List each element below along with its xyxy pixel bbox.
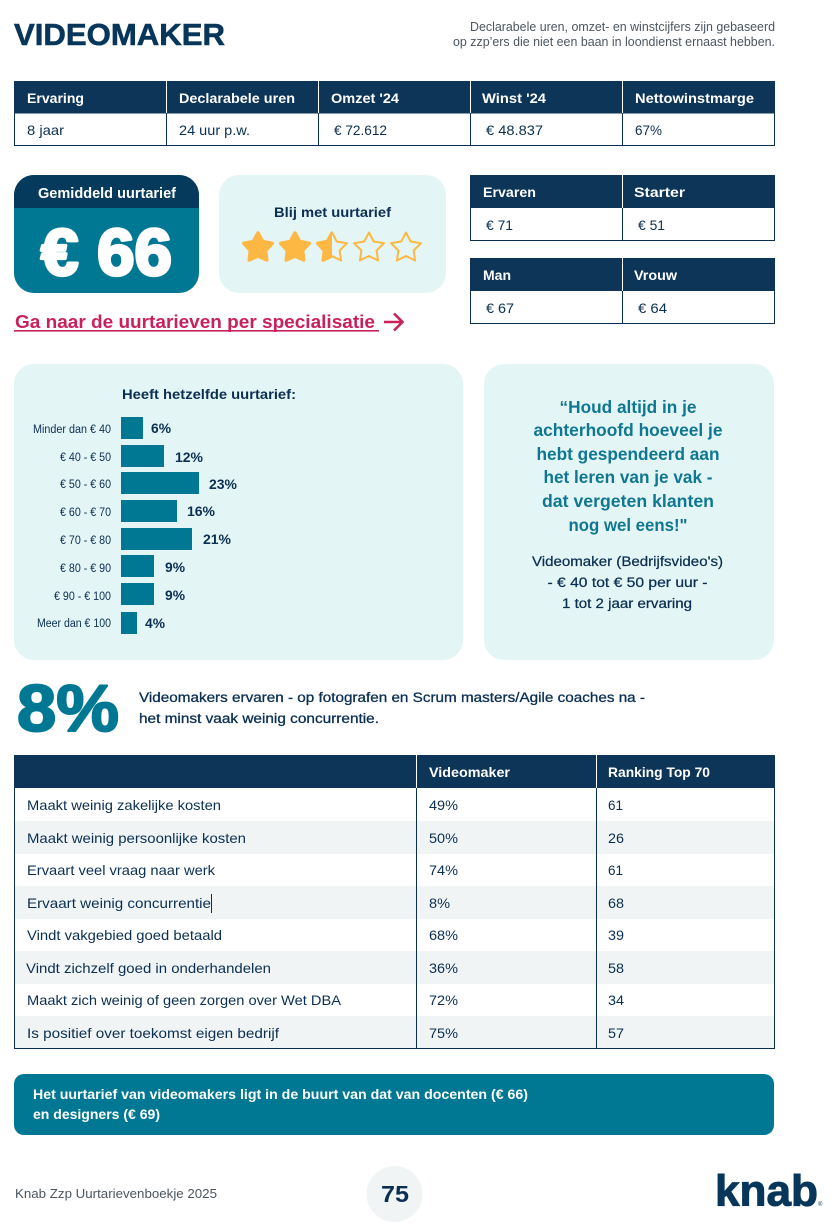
- column: ranking values: 57: [608, 1025, 624, 1041]
- callout: en designers (€ 69): [33, 1107, 160, 1122]
- intro note: Declarabele uren, omzet- en winstcijfers zijn gebaseerd: [470, 20, 775, 34]
- table: experience: Ervaren: [483, 184, 536, 200]
- table: gender: € 67: [486, 300, 514, 316]
- row labels: Maakt zich weinig of geen zorgen over Wet DBA: [27, 992, 342, 1008]
- card: happy with rate: Blij met uurtarief: [274, 204, 391, 220]
- table: key figures: Ervaring: [27, 90, 84, 106]
- quote text: [534, 397, 723, 535]
- star rating: [244, 232, 421, 260]
- row labels: Is positief over toekomst eigen bedrijf: [27, 1025, 279, 1041]
- intro note: op zzp’ers die niet een baan in loondienst ernaast hebben.: [453, 35, 775, 49]
- bar chart: € 50 - € 60: [60, 479, 111, 491]
- row labels: Vindt vakgebied goed betaald: [27, 927, 222, 943]
- quote attribution: Videomaker (Bedrijfsvideo's): [532, 554, 723, 569]
- quote text: dat vergeten klanten: [542, 491, 714, 511]
- bar chart: [33, 417, 237, 634]
- bar chart: 12%: [175, 450, 203, 465]
- stat description: [139, 690, 645, 726]
- bar chart: € 60 - € 70: [60, 507, 111, 519]
- table: key figures: 67%: [635, 122, 662, 138]
- panel: rate distribution: Heeft hetzelfde uurtarief:: [122, 386, 296, 402]
- footer source: Knab Zzp Uurtarievenboekje 2025: [15, 1187, 217, 1201]
- arrow: [384, 314, 402, 330]
- table: gender: € 64: [638, 300, 667, 316]
- column: Videomaker values: 8%: [429, 895, 450, 911]
- bar chart: € 90 - € 100: [54, 591, 111, 603]
- bar chart: € 70 - € 80: [60, 535, 111, 547]
- column: Videomaker values: [429, 797, 458, 1041]
- table: key figures: Winst '24: [482, 90, 546, 106]
- row labels: [26, 797, 342, 1041]
- column: ranking values: [608, 797, 624, 1041]
- bar chart: 23%: [209, 477, 237, 492]
- column: ranking values: 26: [608, 830, 624, 846]
- quote text: het leren van je vak -: [544, 467, 713, 487]
- bar chart: 16%: [187, 504, 215, 519]
- table: experience: € 71: [486, 217, 513, 233]
- table: experience: [470, 175, 775, 241]
- column: ranking values: 58: [608, 960, 624, 976]
- column: Videomaker values: 50%: [429, 830, 458, 846]
- bar chart: Meer dan € 100: [37, 618, 111, 630]
- panel: quote: [484, 364, 774, 660]
- table: key figures: Nettowinstmarge: [635, 90, 754, 106]
- column: Videomaker values: 68%: [429, 927, 458, 943]
- table: gender: [470, 258, 775, 324]
- row labels: Maakt weinig persoonlijke kosten: [27, 830, 246, 846]
- bar chart: 4%: [145, 616, 165, 631]
- table: key figures: Omzet '24: [331, 90, 399, 106]
- stat description: Videomakers ervaren - op fotografen en Scrum masters/Agile coaches na -: [139, 690, 645, 705]
- table: key figures: 24 uur p.w.: [179, 122, 250, 138]
- bar chart: 9%: [165, 560, 185, 575]
- table: key figures: € 48.837: [486, 122, 543, 138]
- stat description: het minst vaak weinig concurrentie.: [139, 711, 379, 726]
- bar chart: 6%: [151, 421, 171, 436]
- quote text: nog wel eens!": [568, 515, 688, 535]
- table: key figures: 8 jaar: [27, 122, 64, 138]
- row labels: Ervaart weinig concurrentie: [27, 895, 211, 911]
- title: VIDEOMAKER: [14, 17, 225, 52]
- bar chart: € 40 - € 50: [60, 452, 111, 464]
- quote attribution: [532, 554, 723, 611]
- knab logo: ®: [818, 1201, 823, 1208]
- card: average hourly rate: € 66: [41, 215, 172, 289]
- quote attribution: - € 40 tot € 50 per uur -: [548, 575, 708, 590]
- column: Videomaker values: 74%: [429, 862, 458, 878]
- table: experience: Starter: [634, 184, 686, 200]
- table: key figures: Declarabele uren: [179, 90, 295, 106]
- big stat: 8%: [17, 671, 119, 745]
- card: average hourly rate: Gemiddeld uurtarief: [38, 186, 176, 202]
- column: ranking values: 61: [608, 862, 623, 878]
- column: ranking values: 68: [608, 895, 624, 911]
- page number: [366, 1166, 422, 1222]
- quote text: hebt gespendeerd aan: [536, 444, 720, 464]
- column: Videomaker values: 36%: [429, 960, 458, 976]
- column: ranking values: 39: [608, 927, 624, 943]
- column: Videomaker values: 75%: [429, 1025, 458, 1041]
- knab logo: knab: [715, 1166, 818, 1216]
- table: key figures: [14, 81, 775, 146]
- callout: [14, 1074, 774, 1135]
- page number: 75: [381, 1181, 409, 1207]
- quote attribution: 1 tot 2 jaar ervaring: [562, 596, 692, 611]
- row labels: Maakt weinig zakelijke kosten: [27, 797, 221, 813]
- column: Videomaker values: 72%: [429, 992, 458, 1008]
- row labels: Ervaart veel vraag naar werk: [27, 862, 216, 878]
- bar chart: Minder dan € 40: [33, 424, 111, 436]
- quote text: achterhoofd hoeveel je: [534, 420, 723, 440]
- bar chart: 21%: [203, 532, 231, 547]
- table: key figures: € 72.612: [334, 122, 387, 138]
- intro note: [453, 20, 775, 49]
- bar chart: 9%: [165, 588, 185, 603]
- bar chart: € 80 - € 90: [60, 563, 111, 575]
- column: ranking values: 34: [608, 992, 624, 1008]
- row labels: Vindt zichzelf goed in onderhandelen: [26, 960, 271, 976]
- table: gender: Man: [483, 267, 511, 283]
- panel: rate distribution: [14, 364, 463, 660]
- table: ranking: Videomaker: [429, 764, 511, 780]
- table: ranking: [14, 755, 775, 1049]
- card: average hourly rate: [14, 175, 199, 293]
- quote text: “Houd altijd in je: [560, 397, 697, 417]
- table: gender: Vrouw: [634, 267, 677, 283]
- column: ranking values: 61: [608, 797, 623, 813]
- table: ranking: Ranking Top 70: [608, 764, 710, 780]
- card: happy with rate: [219, 175, 446, 293]
- table: experience: € 51: [638, 217, 665, 233]
- callout: Het uurtarief van videomakers ligt in de buurt van dat van docenten (€ 66): [33, 1087, 528, 1102]
- link: rates per specialisation: Ga naar de uurtarieven per specialisatie: [15, 312, 375, 332]
- column: Videomaker values: 49%: [429, 797, 458, 813]
